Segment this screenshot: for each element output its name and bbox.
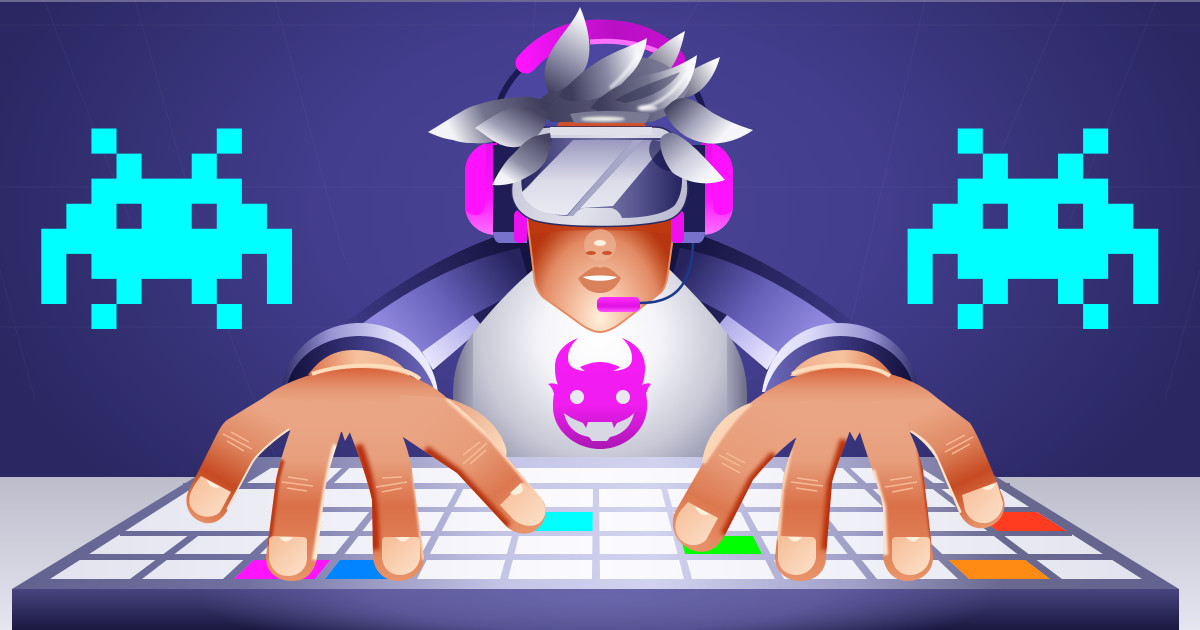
left ear cup (465, 143, 527, 243)
palm (750, 368, 937, 441)
forehead (557, 120, 646, 135)
goggle shadow on face (529, 218, 674, 234)
key area (50, 468, 1142, 579)
head (527, 120, 676, 332)
headset band back (496, 30, 704, 150)
microphone (597, 243, 693, 312)
middle-left finger (266, 430, 341, 581)
left inner leaf (475, 107, 548, 147)
coloured pads (234, 560, 330, 579)
ring finger (860, 432, 933, 581)
pinky (910, 398, 1004, 528)
right ear cup (671, 143, 733, 243)
floor (0, 477, 1200, 630)
icon: right space invader (908, 128, 1158, 329)
nose (584, 229, 616, 261)
index finger (400, 395, 546, 534)
pinky (186, 398, 290, 524)
launchpad keyboard (12, 457, 1179, 630)
centre strip (570, 111, 650, 123)
left long leaf (428, 97, 552, 143)
middle finger (775, 432, 850, 581)
keyboard top surface (12, 457, 1179, 589)
thumb (447, 398, 506, 462)
shirt (453, 268, 747, 462)
right long leaf (664, 98, 753, 144)
face (527, 215, 676, 332)
left arm (282, 232, 550, 392)
right arm (650, 232, 918, 392)
keyboard front face (12, 589, 1179, 630)
index finger (672, 403, 797, 552)
VR goggles (512, 127, 688, 226)
mouth (578, 267, 621, 293)
left lower leaf (492, 133, 551, 185)
right lower leaf (660, 133, 725, 183)
left hand (186, 366, 546, 581)
middle-right finger (350, 430, 424, 581)
thumb (702, 403, 750, 463)
palm (263, 368, 490, 441)
large upper leaf (558, 38, 647, 101)
middle leaf (590, 55, 697, 116)
icon: devil logo (548, 338, 651, 449)
hair (428, 7, 753, 185)
hair base (530, 57, 690, 122)
grid lines (80, 468, 1112, 579)
back leaves (636, 31, 685, 78)
top leaf (545, 7, 589, 95)
icon: left space invader (41, 128, 292, 329)
right hand (673, 365, 1004, 581)
